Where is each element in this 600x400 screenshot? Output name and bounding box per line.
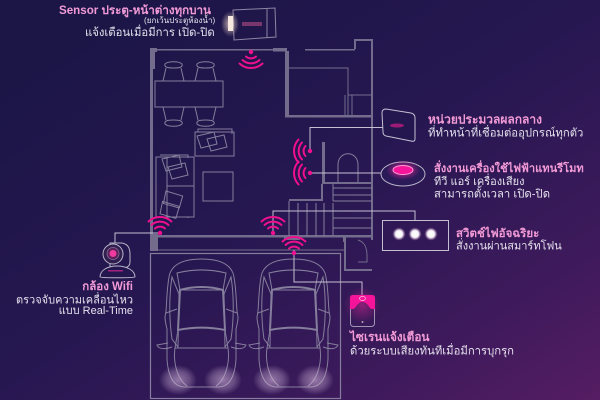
sofas and coffee table bbox=[156, 129, 234, 222]
icon: smart switch bbox=[382, 220, 448, 250]
cars bbox=[157, 259, 338, 395]
siren label: ไซเรนแจ้งเตือน bbox=[348, 329, 430, 344]
remote label: สั่งงานเครื่องใช้ไฟฟ้าแทนรีโมท bbox=[434, 160, 584, 175]
sensor label: (ยกเว้นประตูห้องน้ำ) bbox=[144, 14, 215, 26]
remote label: ทีวี แอร์ เครื่องเสียง bbox=[434, 173, 524, 188]
remote label bbox=[434, 160, 584, 200]
switch label: สวิตช์ไฟอัจฉริยะ bbox=[456, 226, 539, 240]
icon: siren phone bbox=[344, 287, 380, 326]
icon: smart remote bbox=[381, 160, 425, 186]
dining table and chairs bbox=[155, 62, 223, 126]
siren label: ด้วยระบบเสียงทันทีเมื่อมีการบุกรุก bbox=[350, 342, 514, 358]
switch label bbox=[456, 226, 562, 252]
icon: door window sensor bbox=[221, 8, 276, 40]
hub label: หน่วยประมวลผลกลาง bbox=[428, 112, 542, 126]
house walls bbox=[150, 40, 372, 270]
toilet and stairs bbox=[289, 154, 372, 236]
siren label bbox=[348, 329, 514, 358]
switch label: สั่งงานผ่านสมาร์ทโฟน bbox=[456, 238, 562, 252]
icon: wifi camera bbox=[100, 243, 135, 278]
camera label: แบบ Real-Time bbox=[59, 305, 133, 317]
hub label: ที่ทำหน้าที่เชื่อมต่ออุปกรณ์ทุกตัว bbox=[428, 124, 583, 140]
sensor label: แจ้งเตือนเมื่อมีการ เปิด-ปิด bbox=[85, 24, 215, 39]
remote label: สามารถตั้งเวลา เปิด-ปิด bbox=[434, 186, 550, 200]
icon: central hub bbox=[382, 109, 415, 141]
hub label bbox=[428, 112, 583, 140]
camera label: กล้อง Wifi bbox=[82, 280, 133, 293]
camera label: ตรวจจับความเคลื่อนไหว bbox=[16, 292, 133, 306]
sensor label: Sensor ประตู-หน้าต่างทุกบาน bbox=[59, 4, 211, 18]
sensor label bbox=[59, 4, 215, 39]
connector lines bbox=[115, 128, 415, 296]
camera label bbox=[16, 280, 133, 317]
wifi signals bbox=[148, 50, 312, 255]
floor plan bbox=[150, 40, 372, 398]
garage bbox=[150, 250, 345, 398]
